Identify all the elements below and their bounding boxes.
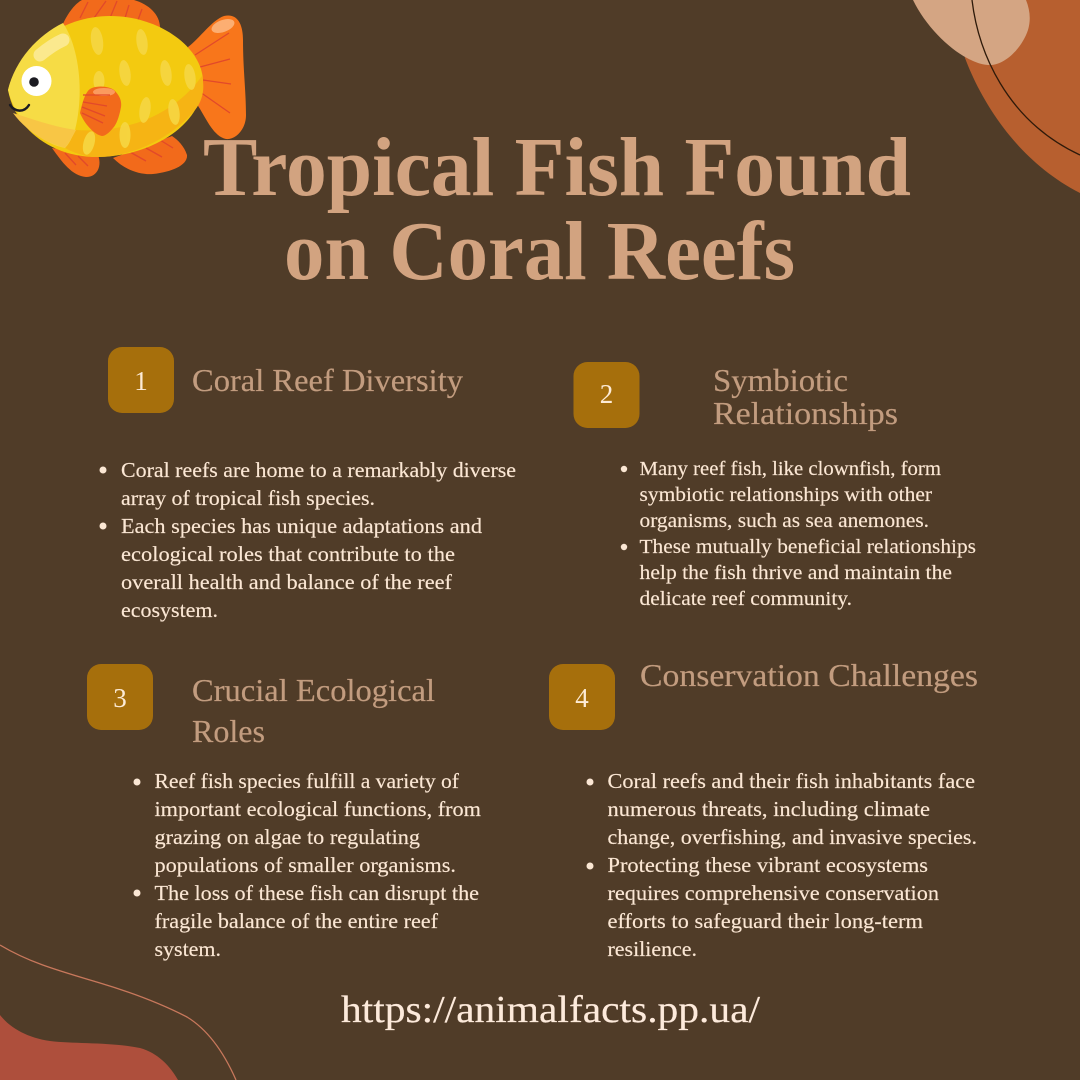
bullets 4: change, overfishing, and invasive species. <box>608 825 977 849</box>
bullets 3: grazing on algae to regulating <box>154 825 420 849</box>
bullets 1: Coral reefs are home to a remarkably diverse <box>121 458 516 482</box>
bullets 2: These mutually beneficial relationships <box>640 536 976 558</box>
bullets 1: array of tropical fish species. <box>121 486 375 510</box>
panel 1: coral reef diversity <box>100 347 516 622</box>
fish body <box>8 16 203 157</box>
bullets 1: overall health and balance of the reef <box>121 570 453 594</box>
fish tail highlight <box>210 16 236 36</box>
bullets 2: delicate reef community. <box>640 588 852 610</box>
bullets 4: Protecting these vibrant ecosystems <box>608 853 928 877</box>
number badge 2: 2 <box>600 379 613 409</box>
bullets 1: Each species has unique adaptations and <box>121 514 482 538</box>
bullets 3: important ecological functions, from <box>154 797 481 821</box>
decoration: bottom left shapes <box>0 945 236 1080</box>
heading 3 <box>192 672 435 749</box>
icon: yellow tropical fish <box>8 0 246 177</box>
number badge 3 <box>87 664 153 730</box>
fish lower head shade <box>13 113 76 148</box>
heading 2: Symbiotic <box>713 362 848 398</box>
fish top fin <box>62 0 160 28</box>
number badge 2 <box>574 362 640 428</box>
bullets 4: numerous threats, including climate <box>608 797 930 821</box>
number badge 4: 4 <box>575 683 589 713</box>
fish tail <box>188 16 246 139</box>
fish side fin highlight <box>93 88 115 96</box>
bullets 4 <box>586 769 977 961</box>
panel 2: symbiotic relationships <box>574 362 976 610</box>
fish fin rays <box>65 1 231 166</box>
bullets 4: Coral reefs and their fish inhabitants face <box>608 769 975 793</box>
heading 2: Relationships <box>713 395 898 431</box>
number badge 1 <box>108 347 174 413</box>
bullets 4: efforts to safeguard their long-term <box>608 909 923 933</box>
bullets 2: help the fish thrive and maintain the <box>640 562 952 584</box>
heading 3: Roles <box>192 713 265 749</box>
footer url: https://animalfacts.pp.ua/ <box>341 989 760 1031</box>
title: Tropical Fish Found <box>203 121 911 214</box>
number badge 3: 3 <box>113 683 127 713</box>
decoration: top right shapes <box>913 0 1080 193</box>
heading 4: Conservation Challenges <box>640 657 978 693</box>
bullets 2: organisms, such as sea anemones. <box>640 510 929 532</box>
heading 3: Crucial Ecological <box>192 672 435 708</box>
fish smile <box>10 105 29 111</box>
heading 1: Coral Reef Diversity <box>192 362 463 398</box>
fish head <box>8 23 80 148</box>
bullets 3 <box>134 769 481 961</box>
bullets 3: The loss of these fish can disrupt the <box>154 881 479 905</box>
bullets 3: populations of smaller organisms. <box>154 853 456 877</box>
panel 4: conservation challenges <box>549 657 978 961</box>
bullets 1: ecological roles that contribute to the <box>121 542 455 566</box>
fish belly shade <box>65 76 203 157</box>
bullets 1 <box>100 458 516 622</box>
fish scales <box>81 26 197 156</box>
bullets 4: requires comprehensive conservation <box>608 881 939 905</box>
panel 3: crucial ecological roles <box>87 664 481 961</box>
heading 2 <box>713 362 898 431</box>
fish bottom fins <box>52 136 187 177</box>
bullets 3: fragile balance of the entire reef <box>154 909 439 933</box>
fish side fin rays <box>82 95 110 123</box>
title <box>203 121 911 298</box>
fish eye <box>22 66 52 96</box>
fish side fin <box>80 87 121 136</box>
fish highlight <box>40 40 63 55</box>
bullets 4: resilience. <box>608 937 697 961</box>
bullets 2: Many reef fish, like clownfish, form <box>640 458 941 480</box>
bullets 3: system. <box>154 937 221 961</box>
number badge 1: 1 <box>134 366 148 396</box>
bullets 2 <box>621 458 976 610</box>
bullets 2: symbiotic relationships with other <box>640 484 932 506</box>
number badge 4 <box>549 664 615 730</box>
bullets 3: Reef fish species fulfill a variety of <box>154 769 460 793</box>
title: on Coral Reefs <box>284 205 795 298</box>
bullets 1: ecosystem. <box>121 598 218 622</box>
